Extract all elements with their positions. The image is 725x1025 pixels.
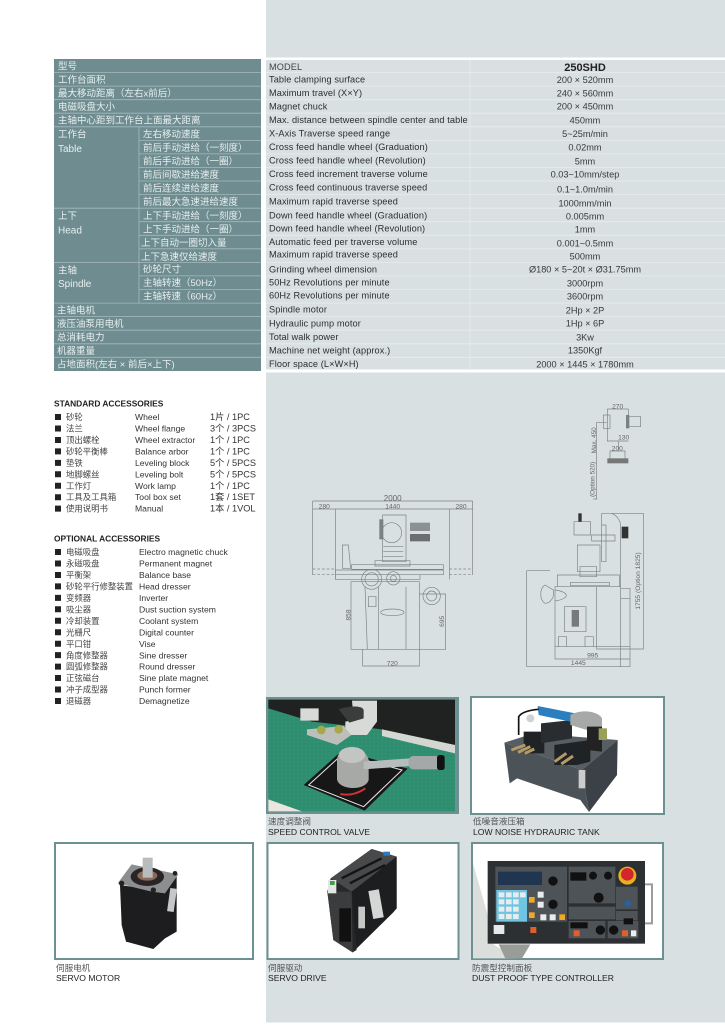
panel: specification labels in Chinese: 型号 (58, 61, 77, 72)
panel: optional accessories: Round dresser (139, 662, 196, 672)
panel: specification table in English: 200 × 520mm (557, 75, 614, 85)
panel: specification table in English: 1350Kgf (568, 345, 603, 355)
panel: specification table in English: 0.1~1.0m/min (557, 184, 613, 194)
panel: specification table in English: 200 × 450mm (557, 101, 614, 111)
panel: specification labels in Chinese: 总消耗电力 (57, 331, 105, 343)
panel: specification table in English: Cross feed increment traverse volume (269, 169, 428, 179)
panel: standard accessories: 工作灯 (66, 481, 92, 491)
panel: optional accessories: Electro magnetic chuck (139, 547, 229, 557)
panel: specification labels in Chinese: 主轴中心距到工作台上面最大距离 (58, 114, 201, 126)
panel: specification table in English: Max. distance between spindle center and table (269, 115, 468, 125)
caption: servo motor: SERVO MOTOR (56, 973, 120, 983)
panel: optional accessories: Permanent magnet (139, 559, 213, 569)
panel: specification labels in Chinese: Table (58, 144, 82, 155)
panel: specification table in English: 0.001~0.5mm (557, 238, 614, 248)
panel: specification table in English: Grinding wheel dimension (269, 264, 377, 274)
panel: specification labels in Chinese: 上下自动一圈切入量 (141, 237, 227, 249)
panel: optional accessories: Dust suction system (139, 604, 216, 614)
panel: specification table in English: 240 × 560mm (557, 88, 614, 98)
panel: optional accessories: 吸尘器 (66, 604, 92, 614)
panel: optional accessories: 冲子成型器 (66, 685, 108, 695)
panel: optional accessories: Inverter (139, 593, 168, 603)
panel: specification table in English: 450mm (570, 115, 601, 125)
panel: optional accessories: Digital counter (139, 627, 194, 637)
right background panel (266, 0, 725, 1022)
panel: specification table in English: Maximum travel (X×Y) (269, 88, 362, 98)
caption: servo drive (268, 962, 327, 983)
panel: optional accessories: Head dresser (139, 582, 191, 592)
panel: standard accessories: 1个 / 1PC (210, 435, 250, 445)
panel: standard accessories: 砂轮平衡棒 (66, 446, 108, 456)
panel: optional accessories: 砂轮平行修整装置 (66, 582, 133, 592)
panel: specification labels in Chinese: 最大移动距离（左右x前后） (58, 87, 177, 99)
panel: specification labels in Chinese: 前后最大急速进给速度 (143, 196, 239, 208)
panel: specification table in English: Floor space (L×W×H) (269, 359, 359, 369)
panel: specification labels in Chinese: 电磁吸盘大小 (58, 101, 116, 113)
panel: optional accessories: 正弦磁台 (66, 673, 100, 683)
panel: specification labels in Chinese (54, 59, 261, 371)
panel: specification table in English: 3000rpm (567, 278, 603, 288)
caption: dust proof type controller (472, 962, 614, 983)
panel: specification labels in Chinese: 上下手动进给（一圈） (143, 224, 238, 236)
panel: specification table in English: X-Axis Traverse speed range (269, 128, 390, 138)
photo: servo motor (55, 843, 253, 959)
panel: standard accessories: 砂轮 (66, 412, 83, 422)
panel: specification table in English: 0.03~10mm/step (551, 169, 619, 179)
panel: optional accessories: 角度修整器 (66, 650, 108, 660)
panel: standard accessories: 1个 / 1PC (210, 446, 250, 456)
panel: specification table in English: 3Kw (576, 332, 594, 342)
panel: standard accessories: Wheel (135, 412, 159, 422)
panel: specification table in English: Hydraulic pump motor (269, 318, 361, 328)
panel: specification table in English: Machine net weight (approx.) (269, 345, 390, 355)
panel: specification labels in Chinese: 液压油泵用电机 (57, 318, 124, 330)
panel: specification table in English: 2Hp × 2P (566, 305, 604, 315)
drawing: side view dimensions: 270 (612, 403, 624, 410)
panel: optional accessories: Sine dresser (139, 650, 187, 660)
drawing: side view dimensions: 995 (587, 653, 599, 660)
panel: optional accessories: Sine plate magnet (139, 673, 209, 683)
caption: low noise hydraulic tank: LOW NOISE HYDRAURIC TANK (473, 827, 600, 837)
caption: dust proof type controller: 防震型控制面板 (472, 962, 533, 973)
caption: servo drive: 伺服驱动 (268, 962, 303, 973)
panel: specification labels in Chinese: 砂轮尺寸 (143, 264, 182, 276)
panel: standard accessories: 工具及工具箱 (66, 492, 116, 502)
panel: optional accessories: 平衡架 (66, 570, 92, 580)
panel: standard accessories: 使用说明书 (66, 504, 108, 514)
panel: specification labels in Chinese: 前后手动进给（一刻度） (143, 142, 248, 154)
caption: dust proof type controller: DUST PROOF TYPE CONTROLLER (472, 973, 614, 983)
panel: specification table in English: 0.005mm (566, 211, 604, 221)
panel: optional accessories: 平口钳 (66, 639, 92, 649)
drawing: side view dimensions (527, 403, 643, 667)
panel: specification labels in Chinese: Spindle (58, 279, 92, 290)
panel: specification table in English: Maximum rapid traverse speed (269, 249, 398, 259)
drawing: side view dimensions: (Option 520) (590, 462, 597, 497)
panel: optional accessories: Balance base (139, 570, 191, 580)
panel: specification table in English (266, 58, 725, 372)
panel: specification table in English: 5mm (575, 156, 596, 166)
drawing: front view dimensions: 2000 (384, 494, 402, 503)
panel: specification labels in Chinese: 左右移动速度 (143, 128, 201, 140)
heading: optional accessories: OPTIONAL ACCESSORIES (54, 534, 161, 544)
drawing: front view dimensions: 280 (319, 504, 330, 511)
photo: low noise hydraulic tank (471, 697, 664, 814)
panel: specification labels in Chinese: Head (58, 226, 82, 236)
panel: standard accessories: 5个 / 5PCS (210, 458, 256, 468)
panel: specification labels in Chinese: 机器重量 (57, 345, 96, 357)
panel: specification labels in Chinese: 主轴电机 (57, 304, 96, 316)
panel: optional accessories: 圆弧修整器 (66, 662, 108, 672)
panel: standard accessories: Manual (135, 504, 163, 514)
drawing: side view dimensions: Max. 450 (591, 427, 598, 453)
panel: specification table in English: Cross feed handle wheel (Revolution) (269, 155, 426, 165)
panel: optional accessories: 退磁器 (66, 696, 92, 706)
drawing: side view dimensions: 130 (618, 435, 630, 442)
panel: standard accessories: Tool box set (135, 492, 181, 502)
panel: standard accessories: 1个 / 1PC (210, 481, 250, 491)
panel: specification table in English: Magnet chuck (269, 101, 328, 111)
panel: specification table in English: 250SHD (564, 62, 606, 74)
panel: standard accessories: 法兰 (66, 424, 83, 434)
panel: specification labels in Chinese: 前后间歇进给速度 (143, 169, 220, 181)
panel: specification labels in Chinese: 前后连续进给速度 (143, 182, 220, 194)
panel: specification labels in Chinese: 前后手动进给（一圈） (143, 155, 238, 167)
panel: standard accessories: Balance arbor (135, 446, 189, 456)
panel: optional accessories: Vise (139, 639, 156, 649)
caption: speed control valve: 速度调整阀 (268, 816, 311, 826)
panel: specification table in English: 5~25m/min (562, 129, 608, 139)
panel: specification table in English: 3600rpm (567, 291, 603, 301)
drawing: front view dimensions (313, 494, 473, 667)
panel: specification table in English: 50Hz Revolutions per minute (269, 277, 390, 287)
panel: optional accessories: 变频器 (66, 593, 92, 603)
panel: specification table in English: Cross feed handle wheel (Graduation) (269, 142, 428, 152)
photo: dust proof type controller (472, 843, 663, 959)
panel: specification table in English: 1000mm/min (558, 198, 612, 208)
caption: servo drive: SERVO DRIVE (268, 973, 327, 983)
caption: speed control valve: SPEED CONTROL VALVE (268, 827, 370, 837)
drawing: front view dimensions: 858 (346, 609, 353, 621)
photo: servo drive (268, 843, 458, 959)
panel: optional accessories: 光栅尺 (66, 627, 92, 637)
panel: standard accessories: 1套 / 1SET (210, 491, 255, 502)
panel: specification labels in Chinese: 主轴转速（60Hz） (143, 291, 222, 303)
panel: standard accessories: Wheel extractor (135, 435, 195, 445)
panel: optional accessories (54, 534, 229, 706)
panel: optional accessories: 冷却装置 (66, 616, 100, 626)
drawing: front view dimensions: 1440 (385, 503, 400, 510)
panel: standard accessories (54, 398, 256, 514)
panel: specification table in English: Ø180 × 5~20t × Ø31.75mm (529, 264, 641, 274)
heading: standard accessories: STANDARD ACCESSORIES (54, 398, 164, 408)
panel: specification table in English: 2000 × 1445 × 1780mm (536, 359, 634, 369)
panel: specification labels in Chinese: 上下手动进给（一刻度） (143, 210, 248, 222)
caption: low noise hydraulic tank: 低噪音液压箱 (473, 816, 525, 826)
panel: specification table in English: Cross feed continuous traverse speed (269, 182, 427, 192)
panel: standard accessories: 5个 / 5PCS (210, 469, 256, 479)
caption: speed control valve (268, 816, 370, 837)
panel: specification table in English: Table clamping surface (269, 74, 365, 84)
panel: specification table in English: Spindle motor (269, 304, 327, 314)
drawing: front view dimensions: 280 (455, 504, 467, 511)
drawing: front view dimensions: 695 (439, 615, 446, 627)
panel: optional accessories: 电磁吸盘 (66, 547, 100, 557)
panel: specification table in English: Maximum rapid traverse speed (269, 196, 398, 206)
panel: specification labels in Chinese: 主轴转速（50Hz） (143, 277, 222, 289)
panel: standard accessories: 垫铁 (66, 458, 83, 468)
panel: specification labels in Chinese: 主轴 (58, 264, 77, 276)
panel: specification table in English: 1mm (575, 224, 596, 234)
drawing: front view dimensions: 720 (387, 660, 398, 667)
panel: standard accessories: Wheel flange (135, 424, 185, 434)
panel: specification labels in Chinese: 工作台面积 (58, 74, 106, 86)
panel: standard accessories: Leveling block (135, 458, 190, 468)
panel: specification table in English: 60Hz Revolutions per minute (269, 290, 390, 300)
panel: specification table in English: 500mm (570, 251, 601, 261)
drawing: side view dimensions: 1755 (Option 1825) (635, 552, 642, 610)
caption: low noise hydraulic tank (473, 816, 600, 837)
panel: standard accessories: Work lamp (135, 481, 176, 491)
panel: optional accessories: Demagnetize (139, 696, 190, 706)
drawing: side view dimensions: 200 (612, 445, 623, 452)
panel: standard accessories: Leveling bolt (135, 469, 184, 479)
panel: specification table in English: 0.02mm (568, 142, 602, 152)
drawing: side view dimensions: 1445 (571, 660, 586, 667)
panel: specification table in English: Down feed handle wheel (Graduation) (269, 210, 427, 220)
panel: standard accessories: 顶出螺栓 (66, 435, 100, 445)
panel: standard accessories: 3个 / 3PCS (210, 424, 256, 434)
photo: speed control valve (266, 697, 459, 814)
panel: specification labels in Chinese: 占地面积(左右 × 前后×上下) (57, 358, 175, 370)
panel: specification labels in Chinese: 工作台 (58, 129, 87, 141)
panel: specification table in English: MODEL (269, 62, 302, 72)
panel: specification table in English: 1Hp × 6P (566, 318, 604, 328)
panel: standard accessories: 地脚螺丝 (66, 469, 100, 479)
panel: specification labels in Chinese: 上下 (58, 211, 77, 222)
panel: specification table in English: Automatic feed per traverse volume (269, 237, 417, 247)
panel: standard accessories: 1片 / 1PC (210, 411, 250, 422)
panel: optional accessories: 永磁吸盘 (66, 559, 100, 569)
caption: servo motor: 伺服电机 (56, 962, 91, 973)
panel: optional accessories: Punch former (139, 685, 191, 695)
panel: specification table in English: Down feed handle wheel (Revolution) (269, 224, 425, 234)
panel: specification table in English: Total walk power (269, 332, 339, 342)
panel: standard accessories: 1本 / 1VOL (210, 503, 255, 514)
caption: servo motor (56, 962, 120, 983)
panel: specification labels in Chinese: 上下急速仅给速度 (141, 251, 218, 263)
panel: optional accessories: Coolant system (139, 616, 198, 626)
